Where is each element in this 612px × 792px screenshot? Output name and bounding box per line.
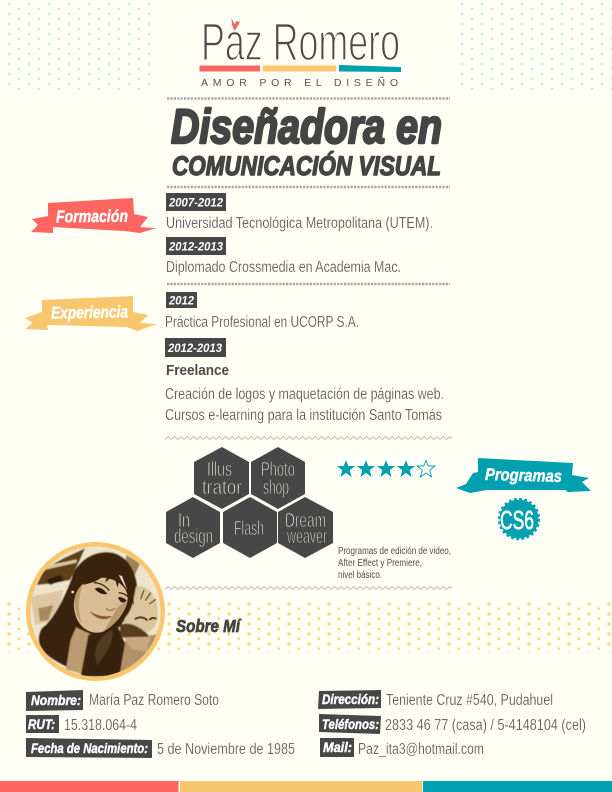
badge: CS6: CS6 xyxy=(500,505,534,535)
title xyxy=(171,101,442,181)
field: Mail xyxy=(320,738,484,758)
hexagon: Flash xyxy=(223,497,277,558)
field: Mail: Mail: xyxy=(323,740,352,755)
text: editing programs note: After Effect y Premiere, xyxy=(338,558,422,569)
badge: CS6 xyxy=(499,499,539,539)
hexagon: InDesign: design xyxy=(174,526,213,548)
field: Fecha de Nacimiento xyxy=(26,738,295,758)
earring xyxy=(71,591,74,593)
text: diploma: Diplomado Crossmedia en Academia Mac. xyxy=(166,259,401,276)
mask details xyxy=(141,590,156,604)
text: editing programs note xyxy=(338,546,451,581)
photo ring xyxy=(26,542,165,681)
ribbon: Formación xyxy=(31,198,156,233)
hexagon: InDesign: In xyxy=(178,510,190,532)
hexagon: InDesign xyxy=(166,497,220,558)
field: Nombre: María Paz Romero Soto xyxy=(89,692,219,709)
chest xyxy=(66,627,93,674)
hexagon: Photoshop: Photo xyxy=(261,459,295,481)
text: university: Universidad Tecnológica Metropolitana (UTEM). xyxy=(166,215,433,232)
field: Dirección: Teniente Cruz #540, Pudahuel xyxy=(386,692,553,709)
hexagon: Dreamweaver: Dream xyxy=(285,510,326,532)
panel: experiencia entries xyxy=(165,292,444,424)
field: Nombre xyxy=(26,690,219,711)
hexagon: Flash: Flash xyxy=(234,518,264,540)
date tag 2012-2013 freelance xyxy=(165,338,226,357)
face xyxy=(74,578,128,633)
dot pattern: top right xyxy=(459,0,612,91)
panel: formación entries xyxy=(166,193,433,276)
eyes xyxy=(95,588,107,594)
logo name: Páz Romero xyxy=(201,13,400,72)
subheading: Freelance: Freelance xyxy=(166,362,229,379)
title line 1: Diseñadora en xyxy=(171,101,442,154)
date tag 2007-2012: 2007-2012 xyxy=(168,196,223,210)
date tag 2012-2013: 2012-2013 xyxy=(168,240,223,254)
date tag 2012-2013 freelance: 2012-2013 xyxy=(167,341,222,355)
arm xyxy=(119,634,156,672)
mask xyxy=(124,586,158,634)
portrait photo xyxy=(26,542,165,681)
hexagon: Illustrator: trator xyxy=(202,477,242,499)
field: RUT: 15.318.064-4 xyxy=(64,717,137,734)
hexagon: Photoshop: shop xyxy=(263,477,289,499)
footer colour bars xyxy=(0,781,612,792)
eyebrows xyxy=(94,583,128,597)
text: editing programs note: nivel básico. xyxy=(338,570,382,581)
title line 2: COMUNICACIÓN VISUAL xyxy=(172,150,441,181)
photo illustration xyxy=(30,546,160,676)
field: Fecha de Nacimiento: Fecha de Nacimiento: xyxy=(31,741,148,756)
field: Nombre: Nombre: xyxy=(31,693,81,708)
divider: zigzag upper xyxy=(165,435,452,441)
dot pattern: yellow band xyxy=(0,600,612,653)
ribbon: Formación: Formación xyxy=(56,207,128,226)
ribbon: Programas xyxy=(456,458,591,493)
text: internship: Práctica Profesional en UCORP S.A. xyxy=(165,314,359,331)
field: Mail: Paz_ita3@hotmail.com xyxy=(358,741,484,758)
divider: dotted below title xyxy=(167,186,450,188)
hexagon: Dreamweaver: weaver xyxy=(286,526,327,548)
hair xyxy=(39,552,137,673)
heading: Sobre Mí: Sobre Mí xyxy=(176,616,242,636)
field: Fecha de Nacimiento: 5 de Noviembre de 1985 xyxy=(157,741,295,758)
dot pattern: top left xyxy=(0,0,152,91)
panel: personal data left xyxy=(26,690,295,758)
hexagon: Illustrator: Illus xyxy=(207,459,232,481)
lips xyxy=(89,611,112,619)
hexagon: Dreamweaver xyxy=(278,497,333,558)
field: Dirección: Dirección: xyxy=(322,692,379,707)
icon: heart accent xyxy=(232,18,240,31)
divider: dotted top xyxy=(167,97,450,100)
ribbon: Programas: Programas xyxy=(485,465,562,486)
hexagon group: programs xyxy=(166,447,333,558)
field: RUT: RUT: xyxy=(28,717,55,732)
logo colour bars xyxy=(200,65,401,72)
text: freelance description xyxy=(165,386,444,424)
logo xyxy=(200,13,401,89)
text: freelance description: Cursos e-learning para la institución Santo Tomás xyxy=(165,407,442,424)
divider: zigzag lower xyxy=(165,585,452,591)
hexagon: Illustrator xyxy=(194,447,249,509)
star rating xyxy=(337,460,435,477)
ribbon: Experiencia: Experiencia xyxy=(51,302,128,323)
field: RUT xyxy=(26,715,137,734)
panel: personal data right xyxy=(318,690,586,758)
top xyxy=(81,623,125,677)
field: Dirección xyxy=(318,690,553,709)
logo tagline: AMOR POR EL DISEÑO xyxy=(201,76,398,89)
text: freelance description: Creación de logos y maquetación de páginas web. xyxy=(165,386,444,403)
field: Teléfonos xyxy=(319,714,586,734)
bangs xyxy=(83,571,134,605)
text: editing programs note: Programas de edición de video, xyxy=(338,546,451,557)
field: Teléfonos: Teléfonos: xyxy=(322,717,379,732)
divider: dotted middle xyxy=(167,283,450,285)
nose shadow xyxy=(106,608,115,610)
date tag 2012: 2012 xyxy=(168,294,194,308)
ribbon: Experiencia xyxy=(25,296,157,331)
hexagon: Photoshop xyxy=(251,447,305,509)
